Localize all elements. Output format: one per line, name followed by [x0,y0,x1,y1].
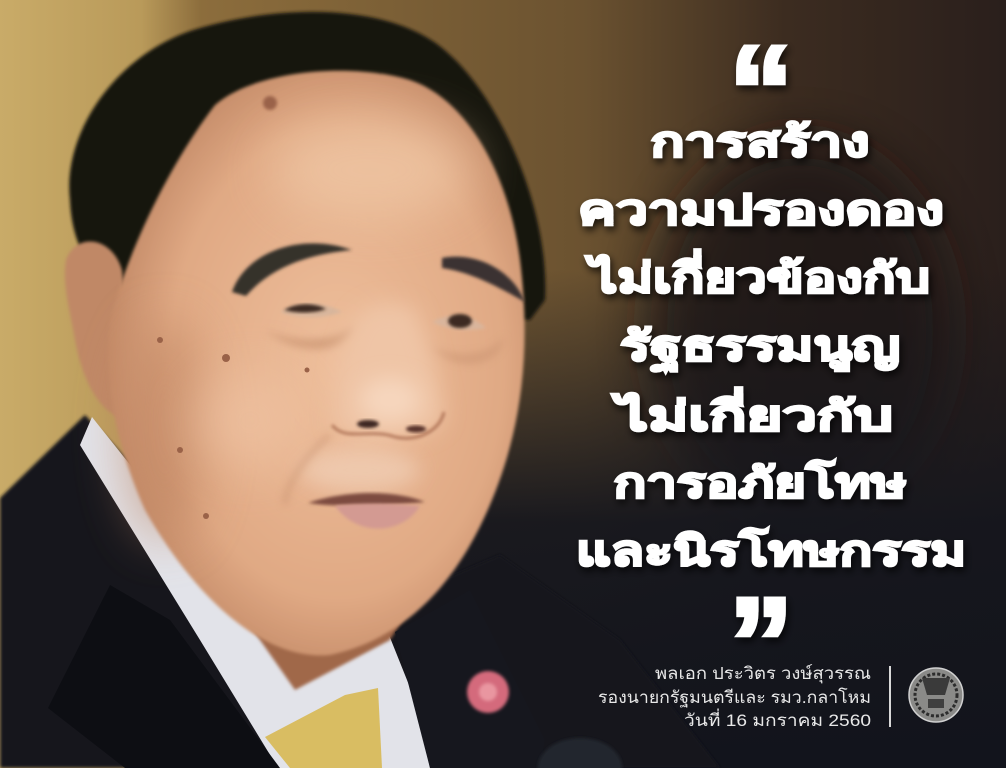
microphone [538,738,622,768]
nose [332,303,444,439]
quote text: ไม่เกี่ยวกับ [611,387,893,439]
portrait photo of the speaker [0,12,720,768]
quote text: และนิรโทษกรรม [576,527,966,574]
left cheek shading [125,320,205,540]
quote text: ความปรองดอง [578,187,944,233]
forehead highlight [270,120,470,220]
opening quotation mark: “ [728,18,794,164]
upper lip area [300,448,420,492]
cheek highlight [195,370,305,470]
attribution: พลเอก ประวิตร วงษ์สุวรรณ [655,664,871,684]
moles [157,96,310,519]
tie [265,688,382,768]
suit jacket [0,415,720,768]
attribution: รองนายกรัฐมนตรีและ รมว.กลาโหม [598,687,871,708]
mouth [308,493,425,529]
icon: government seal [909,668,963,722]
left eyebrow [232,243,352,296]
divider [889,666,891,727]
lapel [48,585,280,768]
quote text: ไม่เกี่ยวข้องกับ [585,249,930,301]
closing quotation mark: ” [728,570,794,716]
quote text: รัฐธรรมนูญ [620,323,900,373]
right eyebrow [442,257,525,302]
attribution: วันที่ 16 มกราคม 2560 [684,708,871,730]
quote text: การอภัยโทษ [614,459,906,506]
eye bags [265,325,355,349]
right eye [432,314,486,330]
face [108,71,525,655]
left eye [280,304,342,317]
ear [65,241,140,421]
hair [69,12,545,320]
neck [190,500,440,690]
shirt collar [80,417,430,768]
lapel pin [467,671,509,713]
right eye bag [430,335,505,364]
quote text [576,119,966,574]
attribution [598,664,871,730]
quote text: การสร้าง [650,119,870,165]
cheek fold [285,435,330,505]
